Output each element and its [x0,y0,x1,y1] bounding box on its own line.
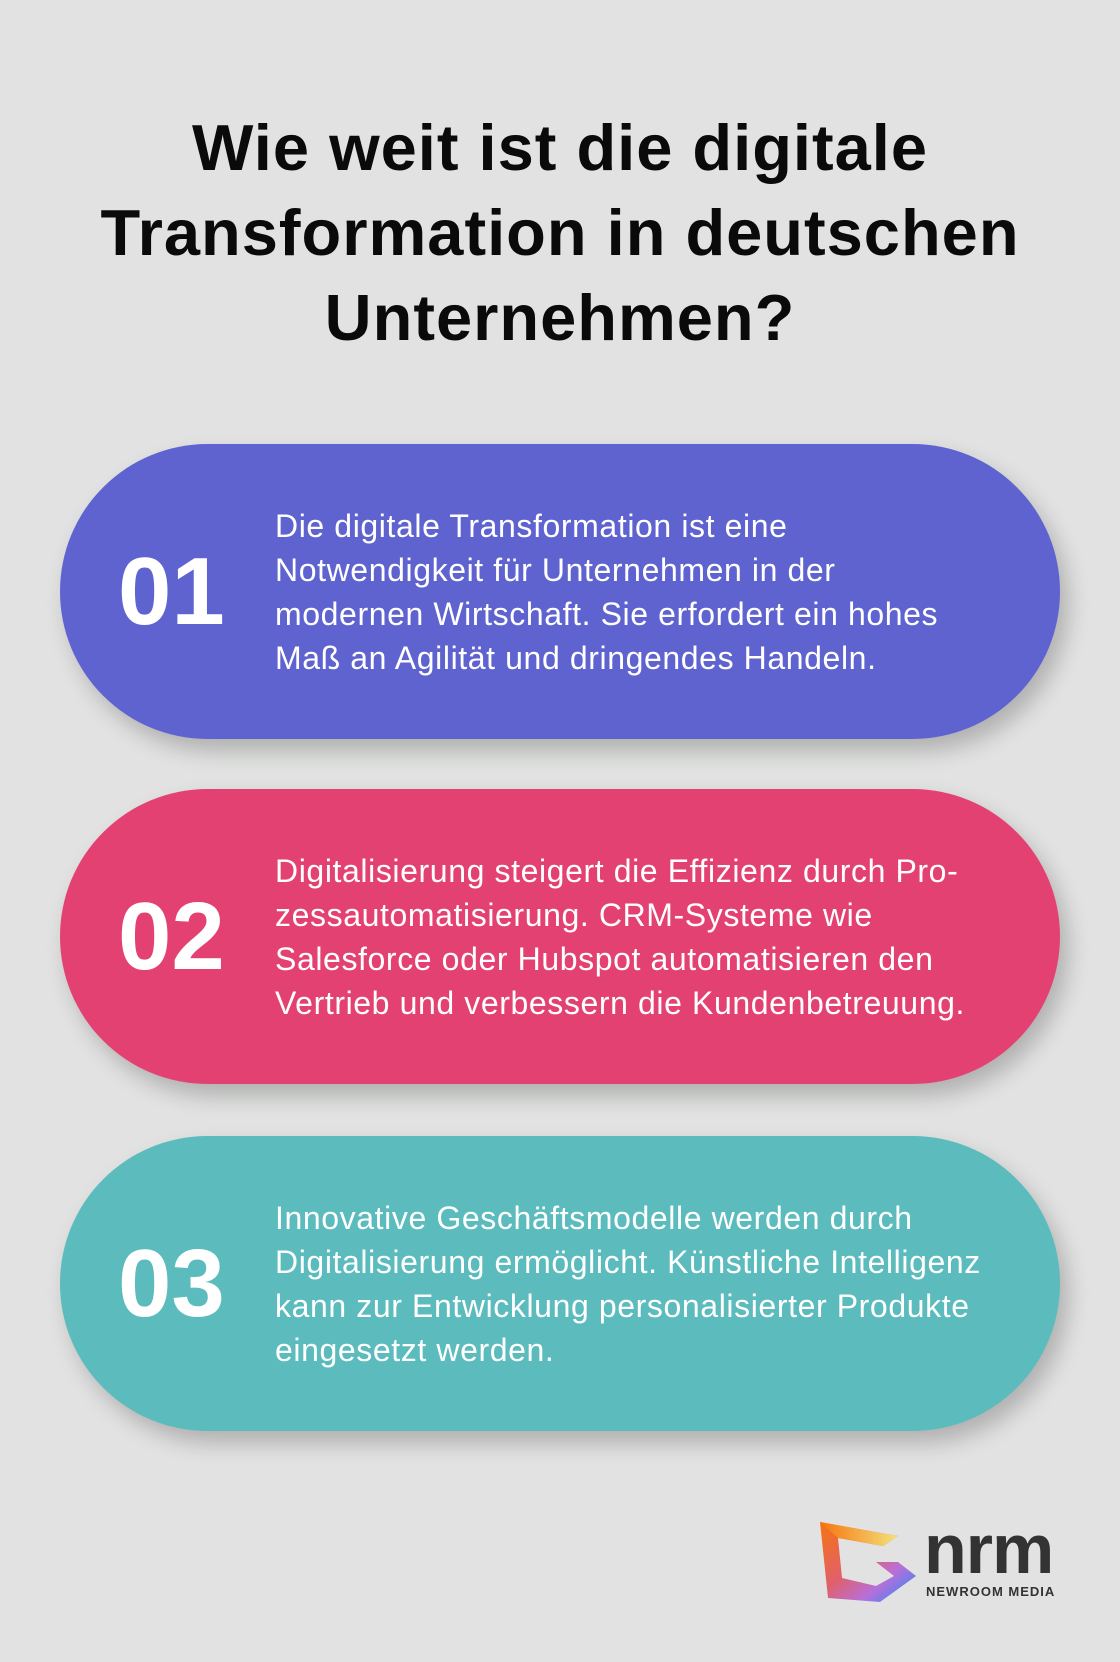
text 02: Salesforce oder Hubspot automatisieren den [275,940,933,976]
icon: logo mark [820,1522,916,1602]
logo: NEWROOM MEDIA [926,1584,1055,1599]
logo text: nrm [924,1510,1053,1588]
text 02: zessautomatisierung. CRM-Systeme wie [275,896,873,932]
text 03: Digitalisierung ermöglicht. Künstliche Intelligenz [275,1244,981,1280]
logo [820,1510,1055,1602]
text 03: eingesetzt werden. [275,1332,554,1368]
number 01: 01 [118,538,225,645]
title: Unternehmen? [325,281,795,354]
title: Wie weit ist die digitale [192,111,928,184]
number 02: 02 [118,883,225,990]
text 01: Maß an Agilität und dringendes Handeln. [275,640,877,676]
text 03: kann zur Entwicklung personalisierter Produkte [275,1288,970,1324]
title: Transformation in deutschen [100,196,1020,269]
text 01: Die digitale Transformation ist eine [275,508,788,544]
panel: 02 [60,789,1060,1084]
text 01: Notwendigkeit für Unternehmen in der [275,552,836,588]
text 02 [275,852,965,1020]
text 01: modernen Wirtschaft. Sie erfordert ein hohes [275,596,938,632]
text 01 [275,508,938,676]
text 02: Vertrieb und verbessern die Kundenbetreuung. [275,984,965,1020]
text 03 [275,1200,981,1368]
panel: 01 [60,444,1060,739]
title [100,111,1020,354]
panel: 03 [60,1136,1060,1431]
number 03: 03 [118,1230,225,1337]
text 02: Digitalisierung steigert die Effizienz durch Pro- [275,852,958,888]
text 03: Innovative Geschäftsmodelle werden durch [275,1200,913,1236]
